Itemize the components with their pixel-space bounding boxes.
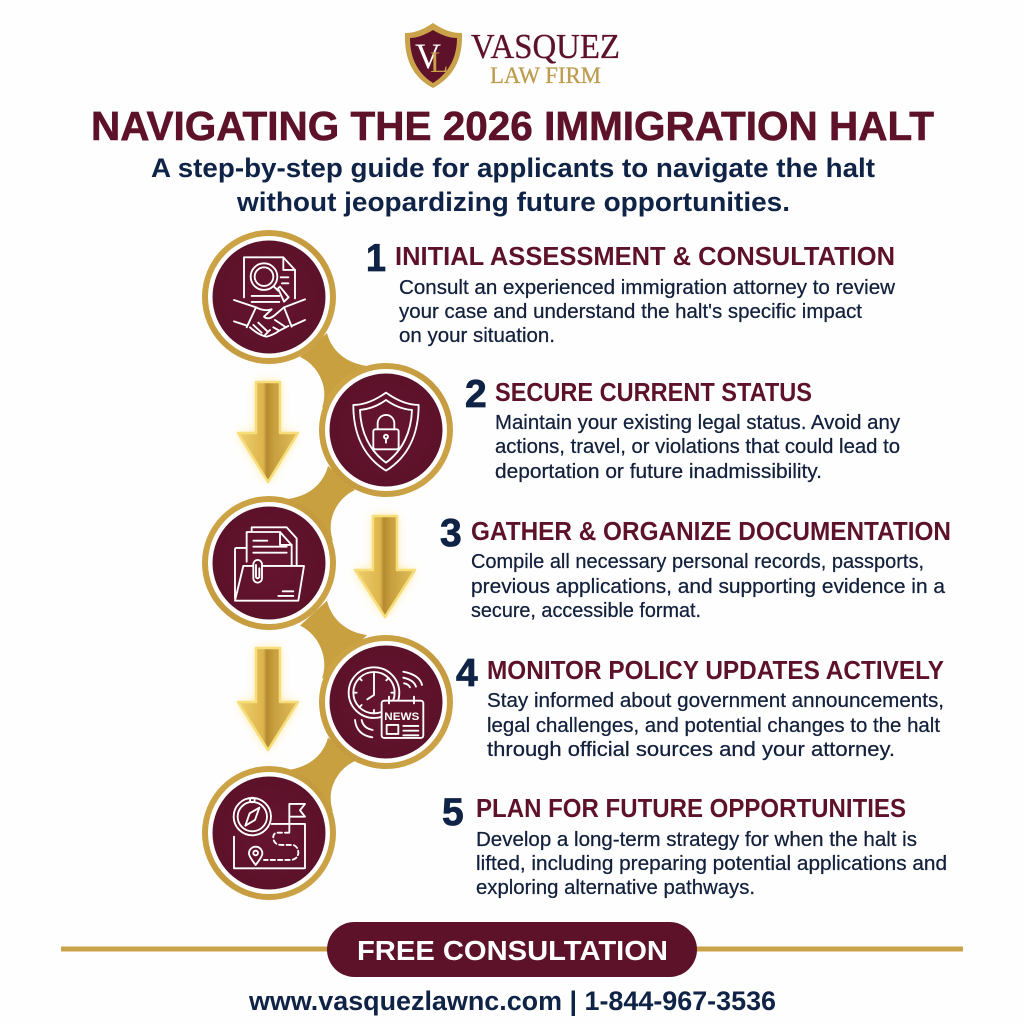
body 3 <box>471 550 946 622</box>
body 1: Consult an experienced immigration attorney to review <box>399 276 895 299</box>
heading 3: GATHER & ORGANIZE DOCUMENTATION <box>471 518 951 546</box>
heading 4: MONITOR POLICY UPDATES ACTIVELY <box>487 657 944 685</box>
icon: compass and map <box>234 798 305 868</box>
step 2 text <box>465 373 901 483</box>
logo subtitle: LAW FIRM <box>490 63 601 88</box>
body 5: Develop a long-term strategy for when the halt is <box>476 828 917 851</box>
number 1: 1 <box>366 237 386 280</box>
body 3: secure, accessible format. <box>471 599 701 622</box>
body 3: previous applications, and supporting evidence in a <box>471 575 946 598</box>
body 4 <box>487 689 944 761</box>
body 4: legal challenges, and potential changes to the halt <box>487 714 940 737</box>
timeline connectors <box>288 333 367 811</box>
icon: folder with documents <box>235 527 304 601</box>
icon: shield and lock <box>353 393 419 471</box>
heading 1: INITIAL ASSESSMENT & CONSULTATION <box>395 243 895 271</box>
step 4 text <box>456 652 944 761</box>
body 2: Maintain your existing legal status. Avoid any <box>495 411 901 434</box>
step 1 circle icon <box>202 230 336 364</box>
heading 2: SECURE CURRENT STATUS <box>495 379 812 407</box>
icon: shield crest: V <box>415 36 441 76</box>
icon: shield crest <box>405 23 462 88</box>
step 1 text <box>366 237 895 347</box>
number 2: 2 <box>465 373 487 416</box>
subtitle <box>151 153 875 217</box>
number 3: 3 <box>440 512 462 555</box>
number 4: 4 <box>456 652 478 695</box>
logo <box>405 23 620 88</box>
body 1 <box>399 276 895 347</box>
logo wordmark: VASQUEZ <box>471 27 620 66</box>
body 1: your case and understand the halt's specific impact <box>399 300 862 323</box>
gold divider <box>61 946 963 952</box>
body 2: actions, travel, or violations that could lead to <box>495 435 900 458</box>
call to action button <box>327 922 697 977</box>
body 4: Stay informed about government announcements, <box>487 689 944 712</box>
body 3: Compile all necessary personal records, passports, <box>471 550 924 573</box>
subtitle: without jeopardizing future opportunities. <box>236 187 790 217</box>
heading 5: PLAN FOR FUTURE OPPORTUNITIES <box>476 795 906 823</box>
call to action button: FREE CONSULTATION <box>357 935 668 966</box>
step 2 circle icon <box>319 363 453 497</box>
icon: shield crest: L <box>430 46 448 79</box>
title: NAVIGATING THE 2026 IMMIGRATION HALT <box>91 103 934 149</box>
icon: document and handshake <box>234 257 305 337</box>
body 2: deportation or future inadmissibility. <box>495 460 822 483</box>
step 3 text <box>440 512 951 622</box>
arrow 1 <box>238 382 298 482</box>
number 5: 5 <box>442 791 464 834</box>
step 3 circle icon <box>202 496 336 630</box>
body 5 <box>476 828 947 899</box>
body 1: on your situation. <box>399 324 555 347</box>
step 5 circle icon <box>202 766 336 900</box>
step 5 text <box>442 791 947 899</box>
contact line: www.vasquezlawnc.com | 1-844-967-3536 <box>248 986 776 1016</box>
body 2 <box>495 411 901 483</box>
body 5: lifted, including preparing potential applications and <box>476 852 947 875</box>
subtitle: A step-by-step guide for applicants to navigate the halt <box>151 153 875 183</box>
body 5: exploring alternative pathways. <box>476 876 755 899</box>
arrow 2 <box>355 516 415 617</box>
step 4 circle icon <box>319 635 453 769</box>
icon: clock and news calendar: NEWS <box>384 711 419 723</box>
arrow 3 <box>238 648 298 750</box>
body 4: through official sources and your attorney. <box>487 738 895 761</box>
